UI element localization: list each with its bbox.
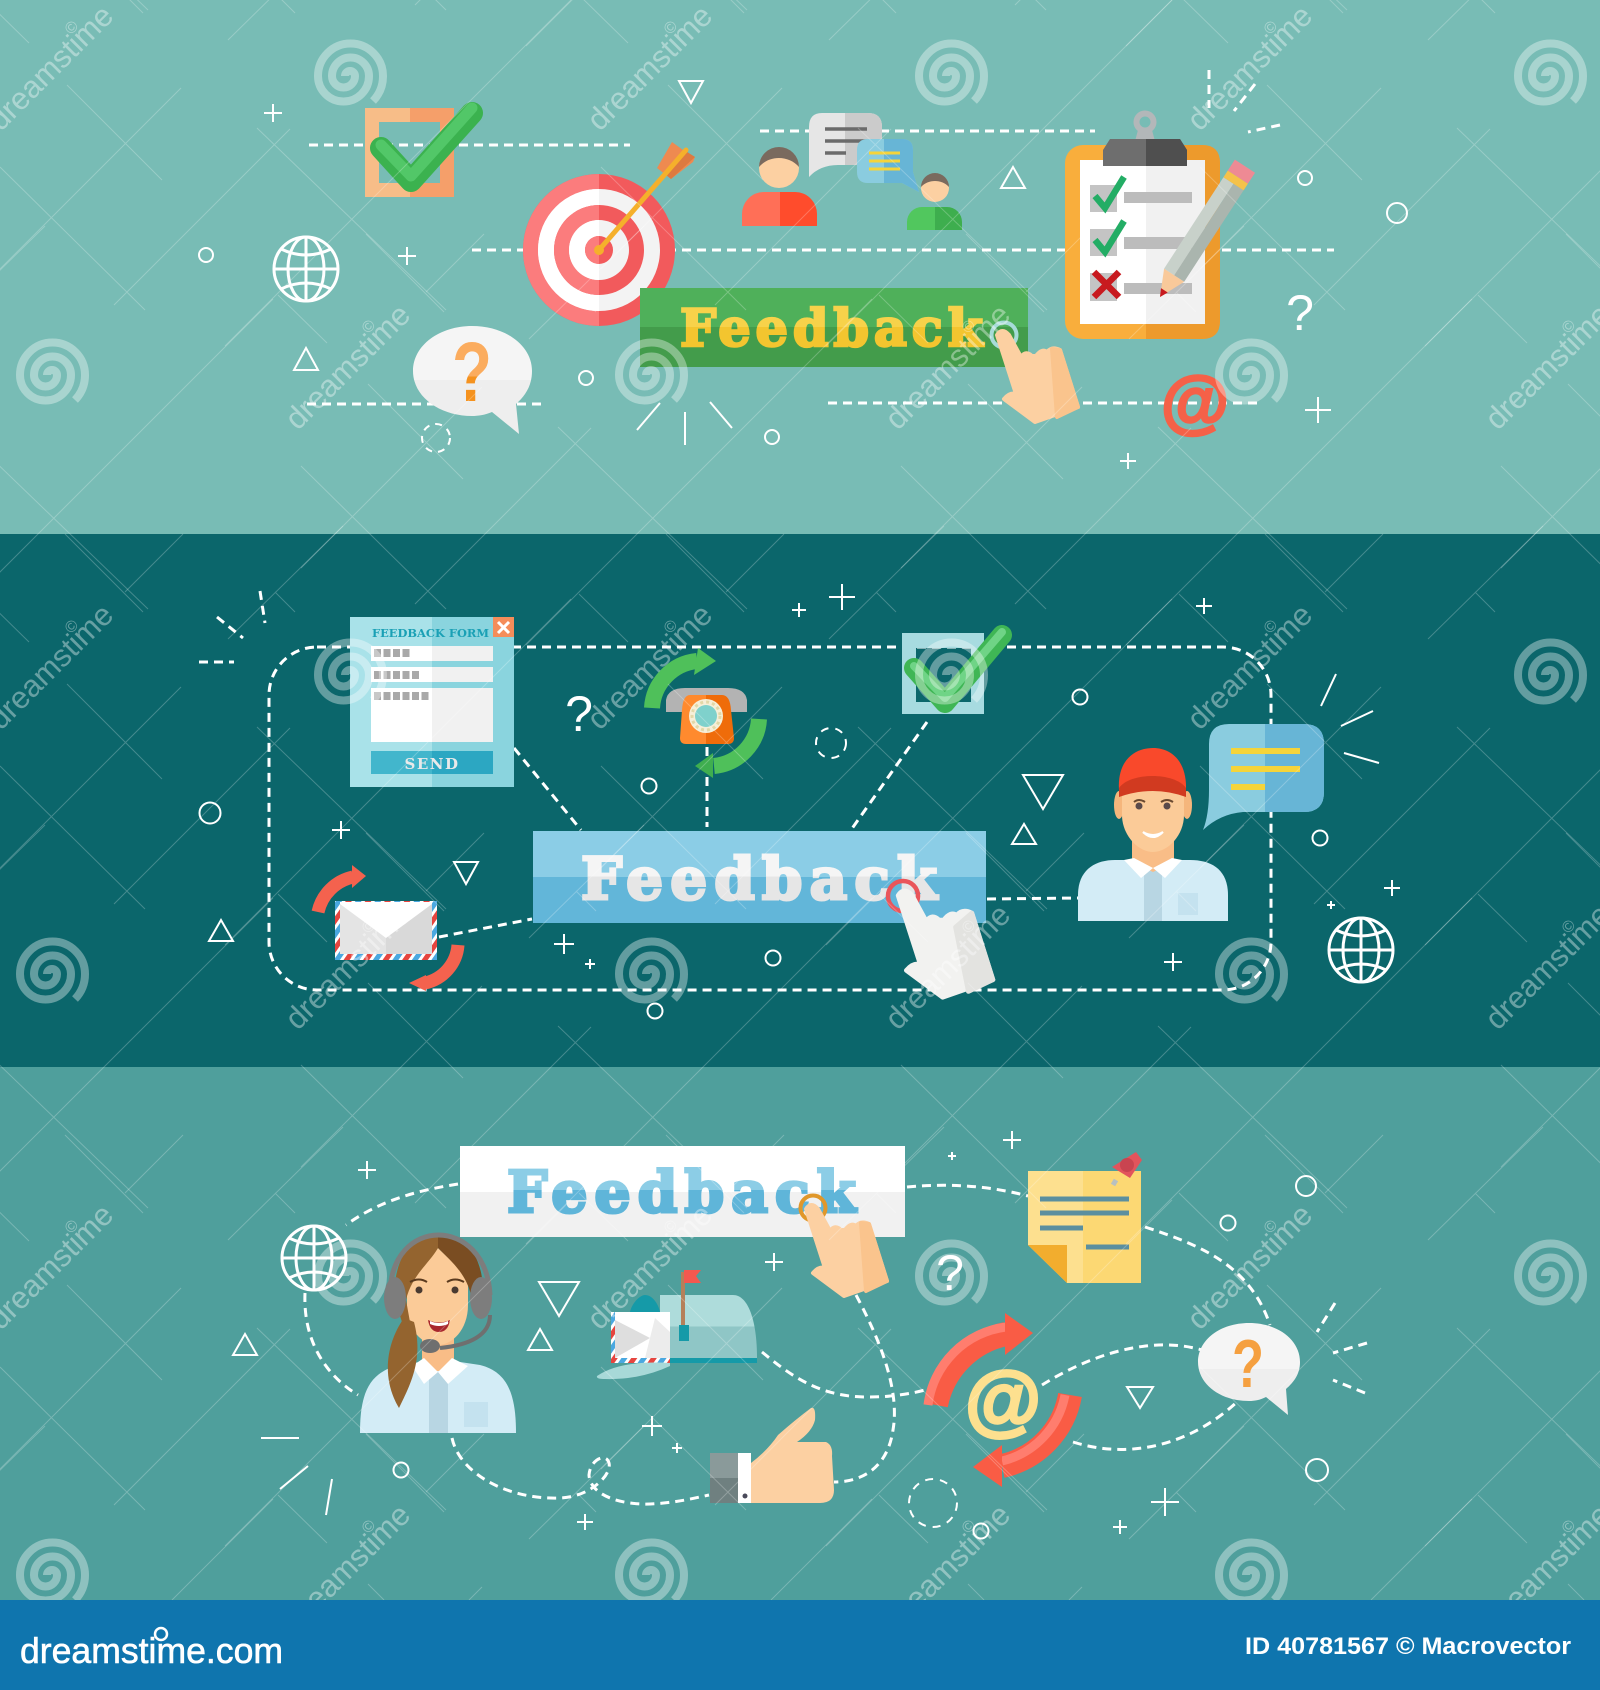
panel: bottom feedback illustration xyxy=(233,1131,1367,1538)
watermark words: dreamstime xyxy=(580,1197,719,1336)
footer bar xyxy=(0,1600,1600,1690)
panel: bottom banner background xyxy=(0,1067,1600,1600)
watermark words: dreamstime xyxy=(1180,597,1319,736)
icon: mailbox with envelope xyxy=(597,1270,757,1379)
watermark words: dreamstime xyxy=(278,297,417,436)
icon: clipboard checklist with pencil xyxy=(1065,114,1255,339)
feedback button green: Feedback xyxy=(680,299,985,359)
watermark words: dreamstime xyxy=(878,1497,1017,1636)
icon: globe xyxy=(282,1226,346,1290)
icon: question speech bubble xyxy=(1198,1323,1300,1415)
watermark words: © xyxy=(1559,917,1579,937)
watermark words: dreamstime xyxy=(580,597,719,736)
watermark words: dreamstime xyxy=(278,1497,417,1636)
icon: rotary telephone with green arrows xyxy=(652,648,759,778)
icon: question speech bubble: ? xyxy=(452,325,492,419)
watermark words: © xyxy=(1261,617,1281,637)
watermark words: © xyxy=(62,18,82,38)
decorative dashed lines top xyxy=(307,70,1334,404)
icon: question mark: ? xyxy=(936,1245,964,1301)
icon: target with arrow xyxy=(523,142,695,326)
character: man with red cap xyxy=(1078,748,1228,921)
icon: question speech bubble: ? xyxy=(1232,1326,1264,1402)
watermark words: © xyxy=(359,1517,379,1537)
small outline shapes bottom xyxy=(233,1131,1328,1538)
watermark words: © xyxy=(959,917,979,937)
watermark words: © xyxy=(959,317,979,337)
watermark words: dreamstime xyxy=(878,297,1017,436)
panel: middle feedback illustration xyxy=(199,584,1400,1018)
icon: pointing hand with ring xyxy=(800,1196,887,1296)
feedback button green xyxy=(640,288,1028,367)
panel: top feedback illustration xyxy=(199,70,1407,469)
icon: feedback form window xyxy=(350,617,514,787)
feedback button white xyxy=(460,1146,905,1237)
watermark words: © xyxy=(62,617,82,637)
icon: sticky note with pin xyxy=(1028,1152,1142,1283)
icon: globe xyxy=(1329,918,1393,982)
watermark words: © xyxy=(1261,1217,1281,1237)
icon: thumbs up hand xyxy=(710,1408,834,1503)
icon: green person xyxy=(907,173,962,230)
panel: top banner background xyxy=(0,0,1600,534)
icon: question speech bubble xyxy=(413,325,532,434)
footer logo spiral xyxy=(155,1628,167,1640)
icon: pointing hand with ring xyxy=(992,322,1078,422)
footer credit: ID 40781567 © Macrovector xyxy=(1245,1633,1571,1660)
feedback button blue xyxy=(533,831,986,923)
icon: blue speech bubble xyxy=(857,139,919,192)
character: call centre agent with headset xyxy=(360,1234,516,1433)
watermark words: dreamstime xyxy=(278,897,417,1036)
watermark words: © xyxy=(1559,1517,1579,1537)
watermark words: dreamstime xyxy=(1180,1197,1319,1336)
icon: white pointing hand with ring xyxy=(888,881,993,997)
dashed rounded frame and connectors xyxy=(199,591,1271,990)
icon: at sign with red cycle arrows: @ xyxy=(965,1355,1041,1443)
watermark words: dreamstime xyxy=(878,897,1017,1036)
icon: globe xyxy=(274,237,338,301)
watermark words: dreamstime xyxy=(1180,0,1319,137)
icon: question mark: ? xyxy=(565,686,593,742)
icon: envelope with red arrows xyxy=(318,865,458,991)
icon: red person xyxy=(742,147,817,226)
small outline shapes middle xyxy=(200,584,1400,1018)
icon: checkbox with green tick xyxy=(365,108,472,197)
watermark words: © xyxy=(359,917,379,937)
icon: feedback form window: SEND xyxy=(405,755,459,773)
footer logo text: dreamstime.com xyxy=(20,1630,283,1671)
watermark words: © xyxy=(661,18,681,38)
watermark words: dreamstime xyxy=(580,0,719,137)
feedback button white: Feedback xyxy=(507,1159,858,1226)
icon: gray speech bubble xyxy=(809,113,882,177)
feedback button blue: Feedback xyxy=(581,845,939,913)
icon: at sign with red cycle arrows xyxy=(928,1313,1070,1487)
watermark words: © xyxy=(1261,18,1281,38)
icon: checkbox light with green tick xyxy=(902,632,1002,714)
icon: blue chat bubble xyxy=(1203,724,1324,830)
icon: question mark: ? xyxy=(1286,285,1314,341)
watermark words: © xyxy=(959,1517,979,1537)
watermark words: © xyxy=(1559,317,1579,337)
watermark words: © xyxy=(661,1217,681,1237)
panel: middle banner background xyxy=(0,534,1600,1067)
watermark words: © xyxy=(62,1217,82,1237)
small outline shapes top xyxy=(199,81,1407,469)
watermark words: © xyxy=(661,617,681,637)
icon: feedback form window: FEEDBACK FORM xyxy=(372,626,489,640)
icon: at sign red: @ xyxy=(1161,362,1229,440)
dashed connecting curves xyxy=(305,1184,1367,1504)
watermark words: © xyxy=(359,317,379,337)
